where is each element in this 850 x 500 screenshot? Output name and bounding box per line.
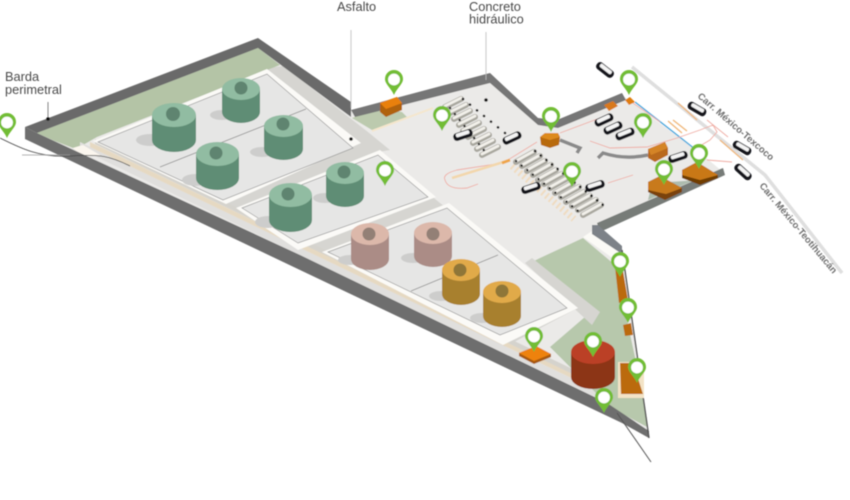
gravel band: south of plaza [525, 258, 600, 325]
green area: north notch [352, 108, 407, 130]
building: south east 1 [648, 176, 682, 200]
gray access road [560, 140, 648, 158]
label: Carr. Mexico-Texcoco: Carr. México-Texcoco [695, 91, 776, 163]
tank 3 [264, 115, 303, 160]
building: north notch [380, 97, 402, 117]
building: tiny north [625, 97, 635, 105]
building: flat south [519, 346, 551, 364]
wall: east stub [592, 225, 622, 254]
tank 11: red [571, 340, 615, 389]
access lane accent [502, 160, 510, 163]
wall: east thin edge [622, 250, 649, 438]
tank 7: pink [351, 223, 389, 270]
panel: tank yard 1 [93, 69, 361, 204]
parking row B [516, 151, 603, 215]
strip: tan along south wall [90, 142, 590, 387]
label: Barda perimetral: Barda [5, 69, 39, 84]
map pins [0, 70, 708, 413]
wall: south [25, 127, 649, 438]
strip: pale along south wall [80, 142, 600, 399]
tank 4 [196, 142, 239, 190]
cream edge: north notch [372, 108, 433, 131]
label: Concreto hidraulico: hidráulico [469, 12, 524, 26]
white band: east stub [583, 231, 622, 262]
wall: south-east [597, 168, 725, 232]
label: Barda perimetral: perimetral [5, 82, 62, 97]
road edge [632, 67, 842, 273]
panel: tank yard 2 [236, 150, 436, 250]
chevrons beside parking [512, 166, 574, 219]
road marks: orange [668, 103, 743, 160]
leader dots [46, 98, 488, 141]
site ground [25, 38, 723, 438]
white corner [73, 145, 100, 157]
tank 6 [269, 183, 312, 232]
building: east large [618, 362, 644, 398]
leader lines [0, 30, 651, 462]
tank 9: gold [442, 259, 480, 305]
tank 2 [222, 78, 260, 123]
tank 10: gold [483, 281, 521, 327]
traffic routes [444, 103, 732, 188]
gravel under the yards [95, 66, 578, 348]
label: Carr. Mexico-Teotihuacan: Carr. México-Teotihuacán [757, 181, 839, 276]
cars [452, 61, 753, 195]
green area: south-east [530, 238, 647, 427]
blue pipeline [635, 102, 705, 157]
tank 8: pink [414, 222, 452, 267]
tank shadows [136, 110, 494, 323]
tank 1 [152, 103, 196, 152]
building: small north [604, 101, 618, 111]
building: east small [623, 323, 633, 336]
panel: tank yard 3 [322, 203, 578, 345]
access lane stripe [452, 160, 510, 178]
wall: north centre [351, 73, 626, 128]
building: gate [540, 133, 560, 148]
strip: gravel along south wall [95, 139, 585, 380]
building: centre east [648, 142, 668, 162]
building: east narrow [615, 265, 628, 303]
tank 5 [326, 162, 364, 207]
building: south east 2 [682, 162, 718, 185]
green area: north strip [37, 48, 280, 148]
green shade: east [648, 168, 723, 200]
parking row A [445, 98, 505, 155]
wall: north-west [25, 38, 351, 133]
